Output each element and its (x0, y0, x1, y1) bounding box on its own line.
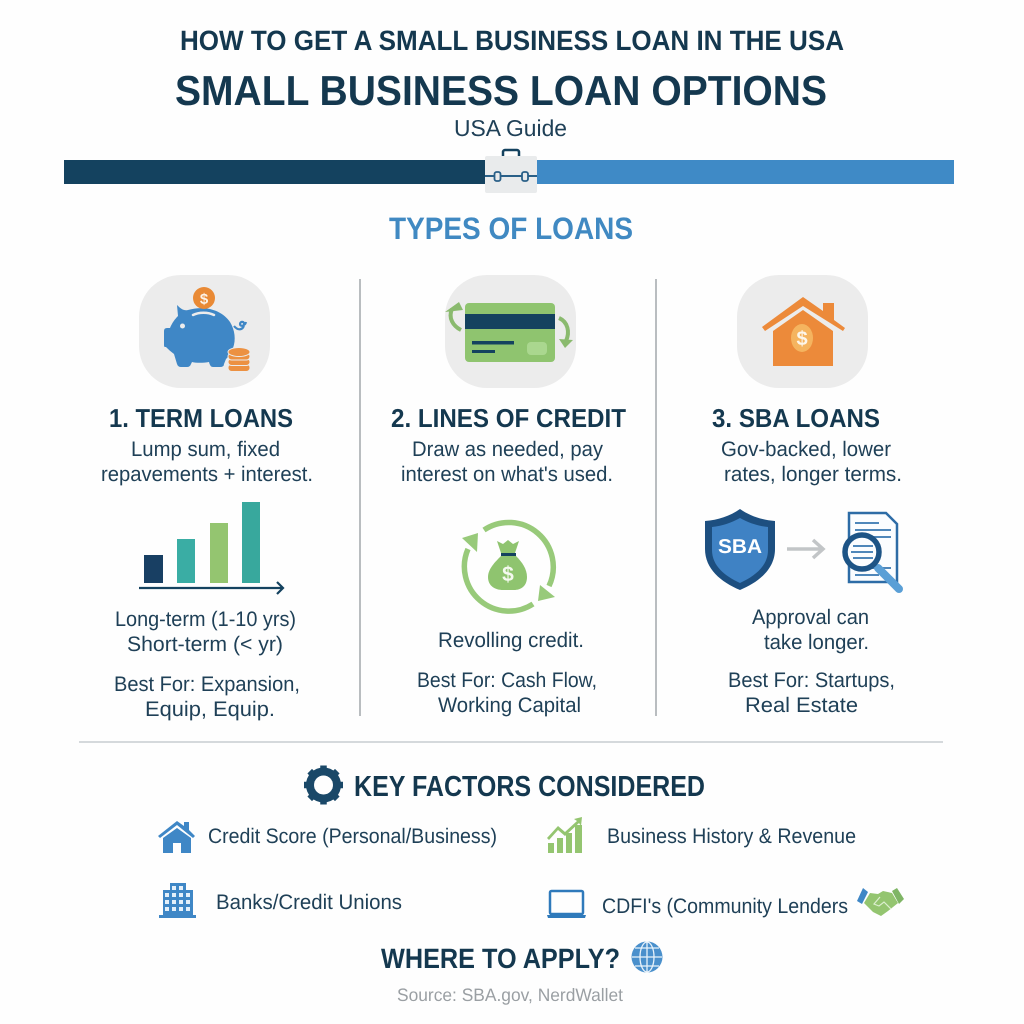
best for: Best For: Startups, (728, 669, 895, 692)
icon: piggy bank (139, 275, 270, 388)
best for (417, 669, 597, 717)
description: Gov-backed, lower (721, 438, 891, 461)
panel: sba loans (705, 275, 902, 717)
heading: 3. SBA LOANS (712, 403, 880, 433)
description: repavements + interest. (101, 463, 313, 486)
icon: house with dollar: $ (796, 328, 808, 350)
best for: Best For: Expansion, (114, 673, 300, 696)
best for: Working Capital (438, 694, 581, 717)
note: Revolling credit. (438, 629, 584, 652)
description: Lump sum, fixed (131, 438, 280, 461)
factor: cdfi: CDFI's (Community Lenders (602, 895, 848, 918)
factor: credit score: Credit Score (Personal/Business) (208, 825, 497, 848)
section heading: types of loans: TYPES OF LOANS (389, 211, 633, 246)
icon: briefcase (485, 150, 537, 193)
icon: revolving money bag: $ (502, 563, 514, 586)
heading: 2. LINES OF CREDIT (391, 403, 626, 433)
description: interest on what's used. (401, 463, 613, 486)
icon: house with dollar (737, 275, 868, 388)
icon: sba shield: SBA (718, 536, 762, 558)
note: Approval can (752, 606, 869, 629)
heading: KEY FACTORS CONSIDERED (354, 771, 705, 803)
icon: document with magnifier (845, 513, 899, 589)
factor: banks: Banks/Credit Unions (216, 891, 402, 914)
section: key factors (158, 766, 904, 918)
icon: credit card (445, 275, 576, 388)
title: how to get a loan: HOW TO GET A SMALL BUSINESS LOAN IN THE USA (180, 25, 844, 56)
terms (115, 608, 296, 656)
icon: gear (304, 766, 343, 804)
factor: business history (547, 817, 856, 853)
best for: Best For: Cash Flow, (417, 669, 597, 692)
factor: banks (159, 883, 402, 918)
terms: Short-term (< yr) (127, 633, 283, 656)
panel: term loans (101, 275, 313, 721)
source: Source: SBA.gov, NerdWallet (397, 985, 623, 1005)
icon: piggy bank: $ (200, 291, 209, 308)
where to apply: WHERE TO APPLY? (381, 943, 620, 974)
factor: business history: Business History & Revenue (607, 825, 856, 848)
icon: building (159, 883, 196, 918)
header: titles (175, 25, 844, 141)
main title: SMALL BUSINESS LOAN OPTIONS (175, 67, 827, 114)
bar chart (139, 502, 283, 594)
icon: house (158, 821, 195, 853)
panel: lines of credit (391, 275, 626, 717)
subtitle: USA Guide (454, 115, 567, 141)
description (721, 438, 902, 486)
heading: 1. TERM LOANS (109, 403, 293, 433)
header bar with briefcase (64, 150, 954, 193)
best for (728, 669, 895, 717)
column dividers (359, 279, 657, 716)
description: Draw as needed, pay (412, 438, 603, 461)
factor: cdfi (547, 888, 904, 918)
note: take longer. (764, 631, 869, 654)
icon: globe (632, 942, 662, 972)
description (401, 438, 613, 486)
arrow (787, 540, 823, 558)
icon: laptop (547, 891, 586, 918)
terms: Long-term (1-10 yrs) (115, 608, 296, 631)
icon: revolving money bag (462, 522, 555, 611)
icon: sba shield (705, 509, 775, 590)
description (101, 438, 313, 486)
description: rates, longer terms. (724, 463, 902, 486)
best for: Equip, Equip. (145, 698, 275, 721)
best for (114, 673, 300, 721)
icon: growth chart (547, 817, 582, 853)
note (752, 606, 869, 654)
factor: credit score (158, 821, 497, 853)
best for: Real Estate (745, 694, 858, 717)
icon: handshake (857, 888, 904, 916)
